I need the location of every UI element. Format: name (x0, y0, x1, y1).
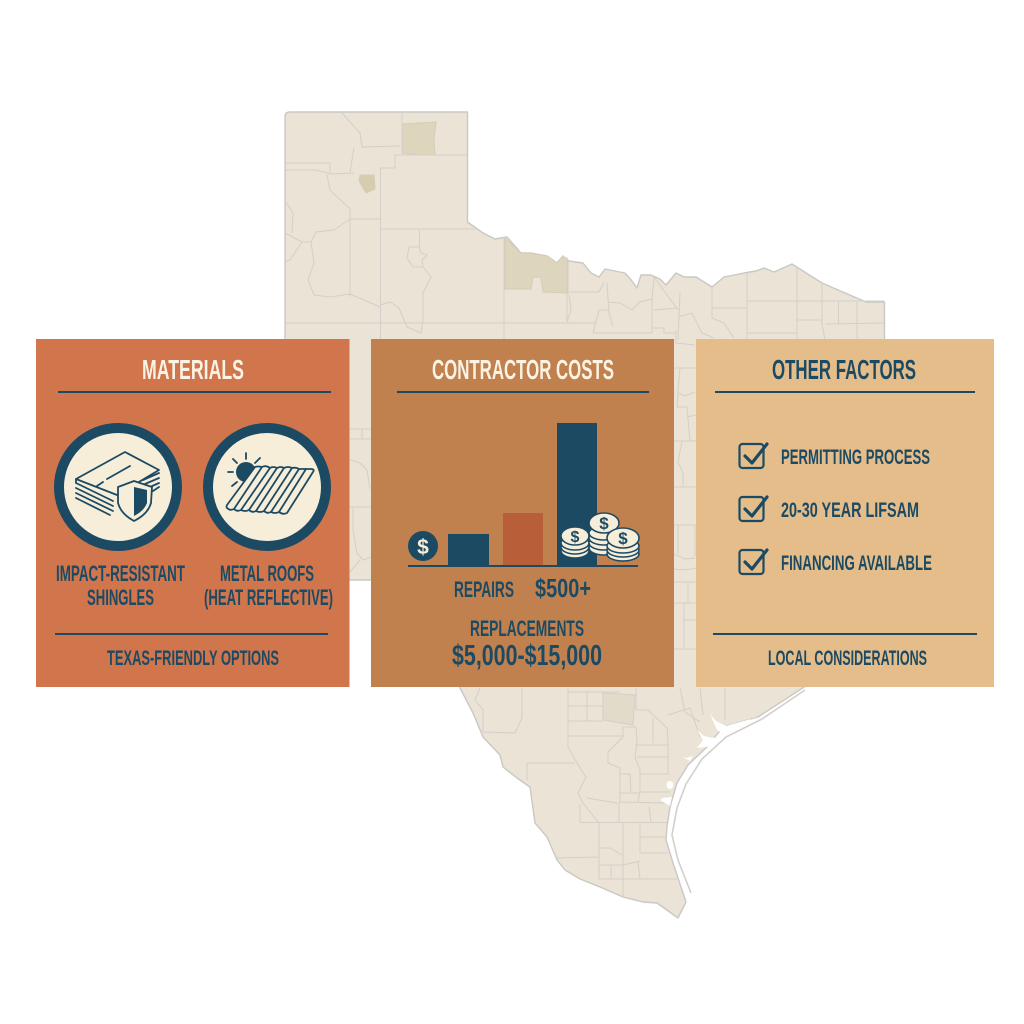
checklist item: permitting: PERMITTING PROCESS (781, 446, 930, 469)
label: impact-resistant shingles: SHINGLES (87, 585, 154, 610)
highlighted county: red river (505, 238, 568, 293)
label: replacements cost: REPLACEMENTS (470, 616, 584, 641)
checklist item: financing (740, 550, 932, 575)
label: metal roofs: METAL ROOFS (220, 561, 314, 586)
county lines south (475, 688, 725, 897)
heading: other factors: OTHER FACTORS (772, 354, 916, 385)
icon: shingles with shield (59, 428, 177, 546)
panel: contractor costs (371, 339, 674, 687)
label: impact-resistant shingles (56, 561, 185, 610)
highlighted county: south (603, 693, 635, 725)
label: repairs cost: $500+ (535, 573, 591, 603)
barrier island (672, 690, 805, 893)
county lines north (285, 112, 884, 340)
checklist item: permitting (740, 444, 930, 469)
coastal lagoon (666, 781, 674, 789)
icon: dollar coin: $ (417, 536, 429, 559)
checklist item: lifespan (740, 497, 919, 522)
state land shape (285, 112, 884, 918)
icon: coin stacks: $ (599, 514, 609, 533)
footer: texas-friendly options: TEXAS-FRIENDLY OPTIONS (107, 647, 279, 670)
label: repairs cost (454, 573, 591, 603)
bar chart (408, 423, 638, 567)
icon: dollar coin (408, 531, 438, 561)
icon: coin stacks: $ (571, 529, 580, 546)
county lines left gap (349, 429, 371, 573)
panel: materials (36, 339, 350, 687)
highlighted county: small panhandle (359, 175, 375, 193)
icon: coin stacks: $ (618, 529, 628, 548)
checklist item: lifespan: 20-30 YEAR LIFSAM (781, 499, 919, 522)
label: repairs cost: REPAIRS (454, 577, 514, 602)
label: metal roofs (204, 561, 333, 610)
label: impact-resistant shingles: IMPACT-RESISTANT (56, 561, 185, 586)
label: replacements cost: $5,000-$15,000 (452, 640, 602, 672)
highlighted county: north panhandle (402, 122, 436, 155)
heading: contractor costs: CONTRACTOR COSTS (432, 354, 614, 385)
coastal bays (660, 714, 758, 806)
checklist item: financing: FINANCING AVAILABLE (781, 552, 932, 575)
icon: coin stacks (561, 513, 639, 561)
icon: metal roof with sun (208, 428, 326, 546)
label: metal roofs: (HEAT REFLECTIVE) (204, 585, 333, 610)
county lines right gap (674, 330, 696, 649)
map: Texas counties (285, 112, 884, 918)
panel: other factors (696, 339, 994, 687)
label: replacements cost (452, 616, 602, 672)
heading: materials: MATERIALS (142, 354, 244, 385)
